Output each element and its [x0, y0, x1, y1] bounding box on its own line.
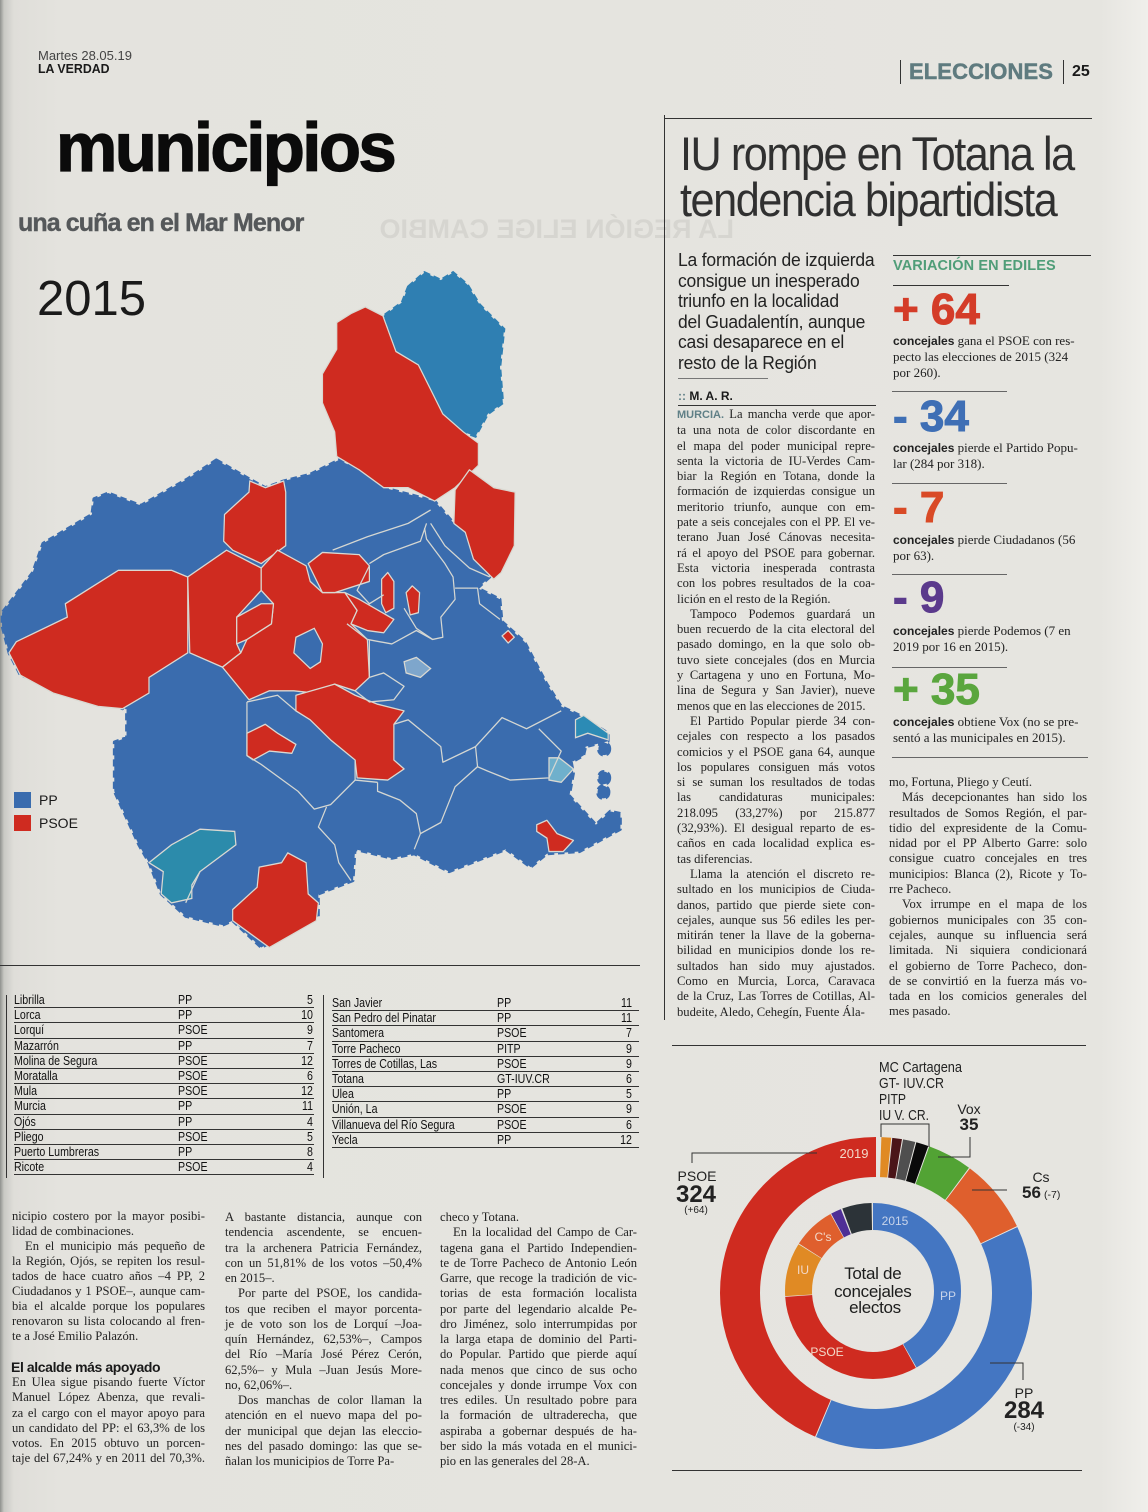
stat: Vox [893, 665, 1078, 745]
bottom text column 3: por parte del legendario alcalde Pe- [440, 1302, 637, 1316]
stat text PSOE: concejales gana el PSOE con res- [893, 333, 1075, 348]
map: small teal areas [149, 657, 608, 903]
main article column 2: rre Pacheco. [889, 882, 951, 896]
main article column 1: y Cartagena y uno en Fortuna, Mo- [677, 668, 875, 682]
results table right: PP [497, 1011, 511, 1025]
results table right: PSOE [497, 1118, 527, 1132]
results table left: PSOE [178, 1069, 208, 1083]
bottom text column 1, second part: Manuel López Abenza, que revali- [12, 1390, 205, 1404]
column divider [664, 115, 665, 1020]
results table left: Puerto Lumbreras [14, 1145, 99, 1159]
main article column 1: ta una nota de color discordante en [677, 423, 875, 437]
ring year and party labels: IU [797, 1263, 809, 1277]
bottom text column 2: 62,5%– y Mula –Juan Jesús More- [225, 1362, 422, 1376]
main article column 1: buen recuerdo de la cita electoral del [677, 622, 875, 636]
results table left: Molina de Segura [14, 1054, 97, 1068]
bottom text column 3: checo y Totana. [440, 1210, 519, 1224]
main article column 2: mo, Fortuna, Pliego y Ceutí. [889, 775, 1032, 789]
main article column 1: Tampoco Podemos guardará un [690, 607, 875, 621]
results table left: PSOE [178, 1054, 208, 1068]
ring year and party labels: 2015 [882, 1214, 909, 1228]
results table right: GT-IUV.CR [497, 1072, 550, 1086]
bottom text column 3 [440, 1210, 637, 1468]
results table left: 5 [307, 993, 313, 1007]
results table right: 5 [626, 1087, 632, 1101]
map: municipal borders [186, 510, 561, 903]
main article column 2: resultados de Somos Región, el par- [889, 806, 1087, 820]
main article column 2: de se convirtió en la fuerza más vo- [889, 974, 1087, 988]
stat rule [892, 667, 1007, 668]
stat: Ciudadanos [893, 483, 1075, 563]
bottom text column 2: Dos manchas de color llaman la [238, 1393, 422, 1407]
centre label: electos [849, 1298, 901, 1317]
stat rule [892, 391, 1007, 392]
main article column 2: consigue cuatro concejales en tres [889, 851, 1087, 865]
results table left: Lorquí [14, 1023, 44, 1037]
results table left: PP [178, 1145, 192, 1159]
bottom text column 1, second part [12, 1375, 205, 1465]
PSOE label: 324 [676, 1181, 717, 1208]
donut chart [676, 1060, 1060, 1449]
subtitle: una cuña en el Mar Menor [18, 209, 303, 237]
results table left: Ojós [14, 1115, 36, 1129]
main article column 1: el mapa del poder municipal repre- [677, 439, 875, 453]
results table right: 11 [621, 996, 632, 1010]
year label: 2015 [37, 272, 146, 326]
main article column 2: tada en los comicios generales del [889, 989, 1087, 1003]
main article column 2: el gobierno de Torre Pacheco, don- [889, 959, 1087, 973]
results table right: PSOE [497, 1057, 527, 1071]
bottom text column 3: dro Jiménez, solo interrumpidas por [440, 1317, 637, 1331]
sidebar heading rule [893, 285, 1009, 286]
results table right: 6 [626, 1072, 632, 1086]
main article column 2: gobiernos municipales con 35 con- [889, 913, 1087, 927]
inner ring 2015 [798, 1216, 948, 1366]
bottom text column 2: en 2015–. [225, 1271, 275, 1285]
PP label: (-34) [1013, 1422, 1035, 1433]
stat: PSOE [893, 285, 1075, 380]
results table left: PP [178, 993, 192, 1007]
PSOE label: (+64) [684, 1205, 708, 1216]
results table right: 7 [626, 1026, 632, 1040]
map: PP base area [2, 460, 620, 948]
Vox label [957, 1101, 981, 1134]
Cs label: (-7) [1044, 1189, 1060, 1201]
bottom text column 1, first part: renovaron su lista colocando al fren- [12, 1314, 205, 1328]
bottom text column 1, first part: bia el alcalde porque los populares [12, 1299, 205, 1313]
results table right: Torre Pacheco [332, 1042, 401, 1056]
main article column 1: si se suman los resultados de todas [677, 775, 875, 789]
standfirst: del Guadalentín, aunque [678, 310, 865, 332]
results table right: 11 [621, 1011, 632, 1025]
standfirst [678, 249, 875, 373]
results table right: Totana [332, 1072, 364, 1086]
results table left: 7 [307, 1039, 313, 1053]
results table right: 9 [626, 1042, 632, 1056]
centre label: concejales [834, 1282, 911, 1301]
stat rule [892, 574, 1007, 575]
standfirst: resto de la Región [678, 352, 817, 372]
main article column 1: pate a seis concejales con el PP. El ve- [677, 515, 875, 529]
standfirst: casi desaparece en el [678, 331, 844, 352]
main article column 1: budeite, Aledo, Cehegín, Fuente Ála- [677, 1005, 865, 1019]
leader lines [692, 1124, 1023, 1380]
results table left [14, 993, 314, 1175]
legend swatch PSOE [14, 815, 31, 831]
stat text Ciudadanos [893, 532, 1075, 563]
stat text PP: concejales pierde el Partido Popu- [893, 440, 1078, 455]
bottom text column 2: ñalan los municipios de Torre Pa- [225, 1454, 394, 1468]
bottom text column 2: quín Hernández, 62,53%–, Campos [225, 1332, 422, 1346]
headline [680, 127, 1076, 226]
results table left: PSOE [178, 1023, 208, 1037]
bottom text column 1, first part: te a José Emilio Palazón. [12, 1329, 138, 1343]
bottom text column 1, second part: En Ulea sigue pisando fuerte Víctor [12, 1375, 205, 1389]
bottom text column 3: tres ediles. Un resultado pobre para [440, 1393, 637, 1407]
bottom text column 3: tagena gana el Partido Independien- [440, 1240, 637, 1254]
main article column 1: sultados han sido muy ajustados. [677, 959, 875, 973]
main article column 1: Como en Murcia, Lorca, Caravaca [677, 974, 875, 988]
results table right: 9 [626, 1057, 632, 1071]
results table left: PP [178, 1039, 192, 1053]
stat: Podemos [893, 573, 1071, 654]
results table right: 6 [626, 1118, 632, 1132]
main article column 2: tidio del expresidente de la Comu- [889, 821, 1087, 835]
map: PSOE areas [9, 307, 573, 948]
results table left: Pliego [14, 1130, 44, 1144]
table rule [0, 965, 640, 966]
main article column 1: lina de Segura y San Javier), nueve [677, 683, 875, 697]
bottom text column 1, first part: En el municipio más pequeño de [25, 1239, 205, 1253]
main article column 1: senta la victoria de IU-Verdes Cam- [677, 454, 875, 468]
article top rule [664, 118, 1092, 119]
results table right: 12 [620, 1133, 632, 1147]
Cs label: Cs [1032, 1169, 1050, 1185]
results table left: Moratalla [14, 1069, 58, 1083]
main article column 2: limitada. Ni siquiera condicionará [889, 943, 1087, 957]
ring year and party labels [797, 1146, 956, 1359]
IU label: IU V. CR. [879, 1108, 929, 1124]
results table left: 10 [301, 1008, 313, 1022]
stat number Ciudadanos: - 7 [893, 483, 944, 532]
bottom text column 2: tos que reciben el mayor porcenta- [225, 1302, 422, 1316]
Vox label: Vox [957, 1101, 981, 1117]
stat text Vox: sentó a las municipales en 2015). [893, 730, 1066, 745]
Cs label: 56 [1022, 1183, 1041, 1202]
main article column 1: de la Cruz, Las Torres de Cotillas, Al- [677, 989, 875, 1003]
main article column 1: (32,93%). El desigual reparto de es- [677, 821, 875, 835]
results table right: PP [497, 996, 511, 1010]
hex map of municipalities [0, 270, 622, 948]
main article column 1: terano Juan José Cánovas necesita- [677, 530, 875, 544]
headline: IU rompe en Totana la [680, 127, 1074, 180]
section tag: 25 [1072, 63, 1090, 80]
bottom text column 3: la larga etapa de dominio del Parti- [440, 1332, 637, 1346]
bottom text column 2: nes del pasado domingo: las que se- [225, 1439, 422, 1453]
bottom text column 2: der municipal que dejan las eleccio- [225, 1424, 422, 1438]
main article column 1: bilidad en municipios donde los re- [677, 943, 875, 957]
stat rule [892, 483, 1007, 484]
chart top rule [672, 1045, 1086, 1046]
stat text Vox: concejales obtiene Vox (no se pre- [893, 714, 1078, 729]
GT label: GT- IUV.CR [879, 1076, 944, 1092]
legend [14, 792, 78, 831]
main article column 1: meritorio triunfo, aunque con em- [677, 500, 875, 514]
PSOE label: PSOE [678, 1168, 716, 1184]
main article column 1: lición en el resto de la Región. [677, 592, 831, 606]
results table left: 4 [307, 1160, 313, 1174]
sidebar heading: VARIACIÓN EN EDILES [893, 258, 1056, 274]
main article column 1: biar la Región en Totana, donde la [677, 469, 875, 483]
main article column 1: cejales, aunque sus 56 ediles les per- [677, 913, 875, 927]
bottom text column 2: je de voto son los de Lorquí –Joa- [225, 1317, 422, 1331]
results table left: 6 [307, 1069, 313, 1083]
byline rule [678, 405, 876, 406]
results table left: PSOE [178, 1160, 208, 1174]
standfirst: consigue un inesperado [678, 270, 859, 290]
results table right: Unión, La [332, 1102, 377, 1116]
bottom text column 1, first part: nicipio costero por la mayor posibi- [12, 1209, 205, 1223]
results table right: PSOE [497, 1026, 527, 1040]
main article column 2: Más decepcionantes han sido los [902, 790, 1087, 804]
bottom text column 1, first part: la Región, Ojós, se repiten los resul- [12, 1254, 205, 1268]
results table left: 5 [307, 1130, 313, 1144]
bottom text column 3: te de Torre Pacheco de Antonio León [440, 1256, 637, 1270]
bottom text column 3: la formación de ultraderecha, que [440, 1408, 637, 1422]
results table left: Librilla [14, 993, 45, 1007]
bottom text column 2: no, 62,06%–. [225, 1378, 292, 1392]
main article column 1: las candidaturas municipales: [677, 790, 875, 804]
bottom text column 1, first part [12, 1209, 205, 1343]
stat text PSOE [893, 333, 1075, 380]
results table right: PITP [497, 1042, 521, 1056]
ring year and party labels: 2019 [840, 1146, 868, 1161]
ring year and party labels: C's [815, 1230, 831, 1244]
results table left: PP [178, 1115, 192, 1129]
main article column 2: municipios: Blanca (2), Ricote y To- [889, 867, 1087, 881]
results table left: Murcia [14, 1099, 46, 1113]
stat number PSOE: + 64 [893, 285, 980, 334]
main article column 1: los populares consiguen más votos [677, 760, 875, 774]
bottom text column 2: A bastante distancia, aunque con [225, 1210, 422, 1224]
bottom text column 2: tendencia ascendente, se encuen- [225, 1225, 422, 1239]
stat number PP: - 34 [893, 392, 969, 441]
results table left: Lorca [14, 1008, 41, 1022]
results table right: San Javier [332, 996, 382, 1010]
bottom text column 2: con un 51,81% de los votos –50,4% [225, 1256, 422, 1270]
main article column 1: con los pobres resultados de la coa- [677, 576, 875, 590]
PSOE label [676, 1168, 717, 1216]
results table left: Mazarrón [14, 1039, 59, 1053]
MC Cartagena label: MC Cartagena [879, 1060, 963, 1076]
table divider middle [323, 995, 324, 1178]
results table right: Ulea [332, 1087, 354, 1101]
date line: Martes 28.05.19 [38, 48, 132, 63]
results table right: Yecla [332, 1133, 358, 1147]
PP label: 284 [1004, 1397, 1045, 1424]
results table right: San Pedro del Pinatar [332, 1011, 436, 1025]
main article column 1: MURCIA. La mancha verde que apor- [677, 407, 875, 421]
newspaper name: LA VERDAD [38, 61, 110, 76]
main article column 1: 218.095 (33,27%) por 215.877 [677, 806, 875, 820]
results table right: Villanueva del Río Segura [332, 1118, 455, 1132]
main article column 2: cejales, aunque su influencia será [889, 928, 1087, 942]
stat rule [892, 757, 1088, 758]
main article column 2 [889, 775, 1087, 1018]
map: PP enclave inside PSOE [294, 628, 322, 668]
bottom text column 2: Por parte del PSOE, los candida- [238, 1286, 422, 1300]
results table left: 8 [307, 1145, 313, 1159]
main article column 1: formación de izquierdas consigue un [677, 484, 875, 498]
bottom text column 3: torias de esta formación localista [440, 1286, 637, 1300]
bottom text column 1, second part: votos. En 2015 obtuvo un porcen- [12, 1436, 205, 1450]
stat: PP [893, 392, 1078, 471]
results table right: PP [497, 1133, 511, 1147]
bottom text column 3: ber sido la más votada en el munici- [440, 1439, 637, 1453]
main article column 1: comicios y el PSOE gana 64, aunque [677, 745, 875, 759]
standfirst rule [678, 378, 768, 379]
results table right: PP [497, 1087, 511, 1101]
bottom text column 2 [224, 1210, 422, 1468]
bottom text column 3: nada menos que cinco de sus ocho [440, 1362, 637, 1376]
stat text Ciudadanos: concejales pierde Ciudadanos (56 [893, 532, 1075, 547]
chart bottom rule [672, 1470, 1082, 1471]
Vox label: 35 [960, 1115, 978, 1134]
legend label PSOE: PSOE [39, 815, 78, 831]
bottom text column 2: tra la archenera Patricia Fernández, [225, 1240, 422, 1254]
results table left: PP [178, 1099, 192, 1113]
bottom text column 3: pio en las generales del 28-A. [440, 1454, 590, 1468]
main article column 1: cejales con respecto a los pasados [677, 729, 875, 743]
main article column 1: Esta victoria inesperada contrasta [677, 561, 875, 575]
main article column 1: rá el apoyo del PSOE para gobernar. [677, 546, 875, 560]
byline: :: M. A. R. [678, 389, 733, 403]
bottom text column 3: En la localidad del Campo de Car- [453, 1225, 637, 1239]
stat text PSOE: pecto las elecciones de 2015 (324 [893, 349, 1068, 364]
stat text Podemos: 2019 por 16 en 2015). [893, 639, 1008, 654]
results table right: 9 [626, 1102, 632, 1116]
stat text Vox [893, 714, 1078, 745]
section tag: ELECCIONES [909, 59, 1053, 84]
results table left: 4 [307, 1115, 313, 1129]
bottom text column 2: atención en el nuevo mapa del po- [225, 1408, 422, 1422]
show-through ghost text: LA REGIÓN ELIGE CAMBIO [379, 214, 734, 244]
main article column 2: mes pasado. [889, 1004, 951, 1018]
main article column 1: danos, partido que pierde siete con- [677, 898, 875, 912]
stat text Podemos [893, 623, 1071, 654]
stat number Vox: + 35 [893, 665, 980, 714]
standfirst: La formación de izquierda [678, 249, 874, 270]
main article column 1: sultado en los municipios de Ciuda- [677, 882, 875, 896]
sidebar top rule [893, 255, 1091, 256]
main article column 1: tuvo siete concejales (dos en Murcia [677, 653, 875, 667]
main article column 1: caños en cada localidad explica es- [677, 836, 875, 850]
main article column 2: nidad por el PP Alberto Garre: solo [889, 836, 1087, 850]
PP label [1004, 1385, 1045, 1433]
table divider left [6, 995, 7, 1178]
main title: municipios [56, 109, 394, 186]
results table right: Santomera [332, 1026, 384, 1040]
ring year and party labels: PP [940, 1289, 956, 1303]
bottom text column 1, first part: Ciudadanos y 1 PSOE–, aunque cam- [12, 1284, 205, 1298]
results table left: 12 [301, 1054, 313, 1068]
main article column 1: mitirán tener la llave de la goberna- [677, 928, 875, 942]
results table left: Mula [14, 1084, 37, 1098]
stat number Podemos: - 9 [893, 573, 944, 622]
results table right [332, 996, 639, 1148]
results table left: PSOE [178, 1130, 208, 1144]
bottom text column 1, second part: un candidato del PP: el 63,3% de los [12, 1421, 205, 1435]
bottom text column 2: del Río –María José Pérez Cerón, [225, 1347, 422, 1361]
bottom text column 3: Garre, que recoge la tradición de vic- [440, 1271, 637, 1285]
ring year and party labels: PSOE [810, 1345, 844, 1359]
stat text Podemos: concejales pierde Podemos (7 en [893, 623, 1071, 638]
map: PP Yecla area [384, 272, 504, 436]
main article column 1: El Partido Popular pierde 34 con- [690, 714, 875, 728]
bottom text column 3: aspiraba a gobernar después de ha- [440, 1424, 637, 1438]
bottom text column 1, second part: za el cargo con el mayor apoyo para [12, 1406, 205, 1420]
main article column 1 [677, 407, 875, 1019]
stat text PSOE: por 260). [893, 365, 941, 380]
results table left: PSOE [178, 1084, 208, 1098]
PP label: PP [1015, 1385, 1033, 1401]
standfirst: triunfo en la localidad [678, 290, 839, 311]
bottom text column 3: concejales y donde irrumpe Vox con [440, 1378, 637, 1392]
results table right: Torres de Cotillas, Las [332, 1057, 437, 1071]
bottom text column 1, second part: taje del 67,24% y en 2011 del 70,3%. [12, 1451, 205, 1465]
legend label PP: PP [39, 792, 58, 808]
stat text PP: lar (284 por 318). [893, 456, 985, 471]
bottom text column 3: do Popular. Partido que pierde aquí [440, 1347, 637, 1361]
stat text Ciudadanos: por 63). [893, 548, 934, 563]
results table left: 11 [302, 1099, 313, 1113]
bottom text column 1, first part: lidad de combinaciones. [12, 1224, 134, 1238]
stat text PP [893, 440, 1078, 471]
main article column 1: pasado domingo, en la que solo ob- [677, 637, 875, 651]
results table left: 9 [307, 1023, 313, 1037]
main article column 1: menos que en las elecciones de 2015. [677, 699, 866, 713]
main article column 1: Llama la atención el discreto re- [690, 867, 875, 881]
centre label: Total de [844, 1264, 901, 1283]
legend swatch PP [14, 792, 31, 808]
results table left: PP [178, 1008, 192, 1022]
PITP label: PITP [879, 1092, 906, 1108]
headline: tendencia bipartidista [680, 173, 1056, 226]
main article column 1: tas diferencias. [677, 852, 753, 866]
results table left: 12 [301, 1084, 313, 1098]
Cs label [1022, 1169, 1060, 1202]
bottom text column 1, first part: tados de hace cuatro años –4 PP, 2 [12, 1269, 205, 1283]
outer ring 2019 [740, 1157, 1012, 1429]
bottom subheading: El alcalde más apoyado [11, 1359, 160, 1375]
main article column 2: Vox irrumpe en el mapa de los [902, 897, 1087, 911]
results table left: Ricote [14, 1160, 44, 1174]
results table right: PSOE [497, 1102, 527, 1116]
